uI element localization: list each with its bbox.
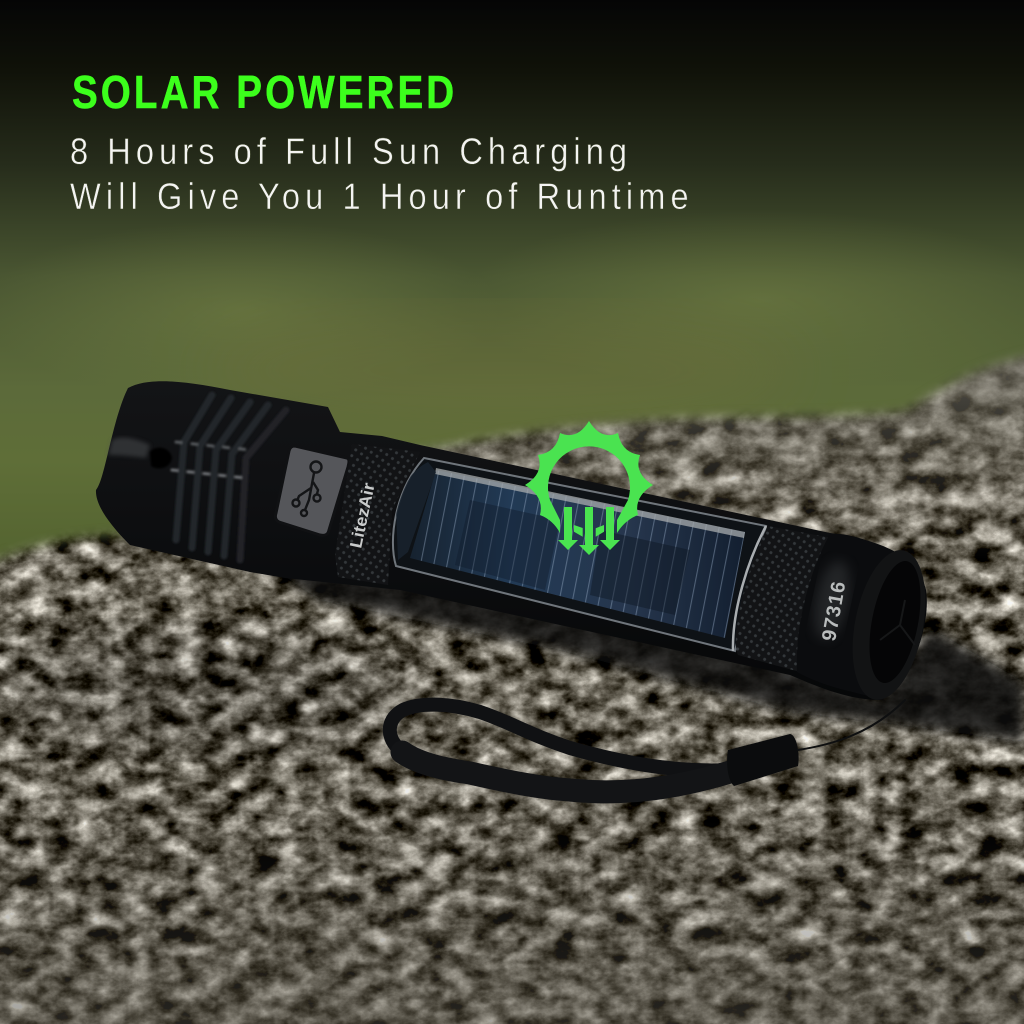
flashlight [96,381,937,706]
icon: left dash [574,525,583,537]
subheading line 2: Will Give You 1 Hour of Runtime [70,176,689,217]
subheading line 1: 8 Hours of Full Sun Charging [70,131,627,172]
cast shadow of flashlight [260,560,1024,742]
panel end ring highlight [733,526,766,651]
icon: sun ring [525,421,653,533]
icon: right dash [596,525,604,537]
wrist strap [390,700,905,792]
tail knurling [736,526,832,672]
heading text block [70,67,689,217]
usb port cover [275,446,349,535]
granite rock surface [0,340,1024,1024]
strap clip [727,734,799,786]
tail collar [797,534,895,696]
solar panel [393,458,766,651]
head bezel highlight [108,437,150,458]
model number: 97316 [818,580,850,643]
knurled grip with brand [335,444,420,585]
icon: centre arrow [579,507,599,555]
usb symbol [292,462,322,516]
icon: solar charging sun with arrows [525,421,653,555]
tail end cap [841,544,937,706]
heading: solar powered: SOLAR POWERED [72,67,454,118]
head cooling fins [150,395,286,560]
flashlight body silhouette [96,381,927,700]
collar highlight [808,558,856,642]
icon: right arrow [600,507,620,550]
brand name: LitezAir [346,481,379,550]
icon: left arrow [558,507,578,550]
